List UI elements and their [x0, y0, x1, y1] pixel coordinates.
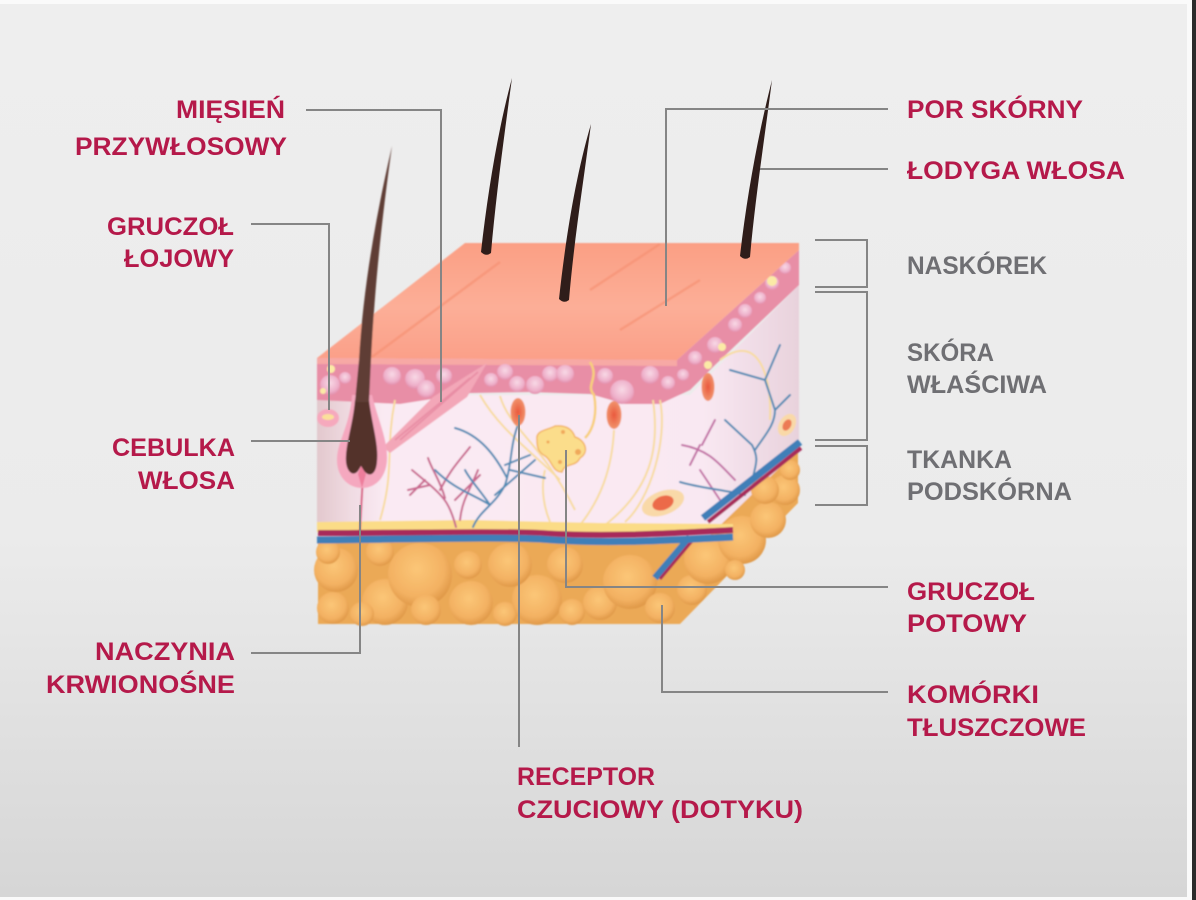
label: naczynia krwionośne: [46, 638, 235, 699]
label: komórki tłuszczowe: [907, 679, 1086, 742]
leader lines: [251, 109, 888, 747]
panel: skin top surface: [317, 243, 799, 360]
Pacinian corpuscles: [638, 411, 800, 522]
label: mięsień przywłosowy: MIĘSIEŃ: [176, 95, 285, 124]
blood vessels: [317, 442, 801, 579]
label: receptor czuciowy: CZUCIOWY (DOTYKU): [517, 796, 803, 824]
label: gruczoł potowy: GRUCZOŁ: [907, 578, 1035, 606]
label: skóra właściwa: SKÓRA: [907, 337, 994, 367]
label: gruczoł potowy: [907, 578, 1035, 638]
panel: subcutaneous fat: [314, 450, 800, 626]
sebaceous gland: [317, 409, 339, 427]
label: naczynia krwionośne: NACZYNIA: [95, 638, 235, 666]
label: gruczoł potowy: POTOWY: [907, 610, 1027, 638]
label: mięsień przywłosowy: [75, 95, 287, 161]
label: tkanka podskórna: PODSKÓRNA: [907, 476, 1072, 506]
label: cebulka włosa: WŁOSA: [138, 467, 235, 495]
hair shafts: [481, 78, 772, 302]
sensory receptors: [510, 373, 714, 429]
capillaries: [360, 345, 790, 530]
hair follicle and bulb: [337, 146, 392, 488]
label: gruczoł łojowy: [107, 213, 234, 273]
layer brackets: [815, 240, 867, 505]
label: skóra właściwa: WŁAŚCIWA: [907, 369, 1047, 399]
label: por skórny: POR SKÓRNY: [907, 94, 1083, 124]
label: cebulka włosa: CEBULKA: [112, 434, 235, 462]
arrector pili muscle: [383, 363, 487, 453]
yellow band above vessels: [317, 520, 733, 532]
label: receptor czuciowy: [517, 763, 803, 824]
nerve fibres: [380, 351, 770, 525]
label: łodyga włosa: ŁODYGA WŁOSA: [907, 157, 1125, 185]
label: tkanka podskórna: [907, 446, 1072, 506]
label: gruczoł łojowy: ŁOJOWY: [124, 245, 234, 273]
panel: epidermis front and side: [317, 250, 799, 404]
label: gruczoł łojowy: GRUCZOŁ: [107, 213, 234, 241]
skin cross-section illustration: [314, 146, 801, 626]
label: receptor czuciowy: RECEPTOR: [517, 763, 655, 791]
label: cebulka włosa: [112, 434, 235, 495]
panel: dermis: [317, 285, 799, 530]
label: skóra właściwa: [907, 337, 1047, 399]
label: mięsień przywłosowy: PRZYWŁOSOWY: [75, 133, 287, 161]
label: tkanka podskórna: TKANKA: [907, 446, 1012, 474]
label: komórki tłuszczowe: KOMÓRKI: [907, 679, 1039, 709]
label: komórki tłuszczowe: TŁUSZCZOWE: [907, 714, 1086, 742]
sweat gland: [537, 362, 595, 472]
label: naskórek: NASKÓREK: [907, 250, 1047, 280]
label: naczynia krwionośne: KRWIONOŚNE: [46, 669, 235, 699]
